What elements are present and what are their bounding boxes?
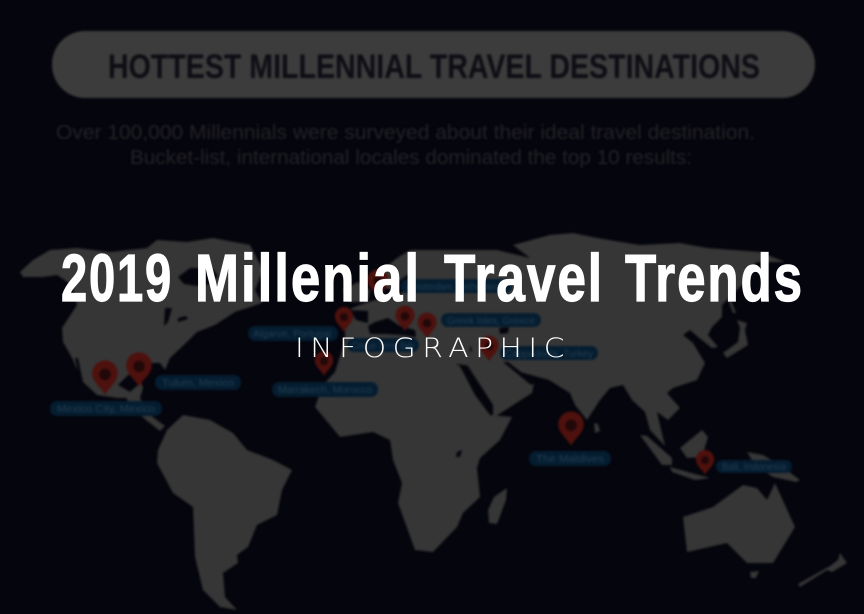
Gulf of Mexico [118,372,143,392]
pin: Marrakech [315,351,333,376]
map pins [92,269,714,475]
header pill [52,31,815,98]
intro text: Over 100,000 Millennials were surveyed about their ideal travel destination. [56,122,755,144]
Mediterranean Sea [368,318,416,337]
pin: Tulum [126,352,152,387]
pin: Amsterdam [368,269,388,298]
Hudson Bay [178,268,218,286]
Bay of Biscay [350,310,368,323]
Eurasia [347,233,785,446]
Borneo [680,430,708,458]
label: Mexico City: Mexico City, Mexico [57,404,155,415]
label: Tulum: Tulum, Mexico [162,378,234,389]
British Isles [343,282,370,302]
label: Tulum [155,375,241,390]
header text: HOTTEST MILLENNIAL TRAVEL DESTINATIONS [108,48,760,86]
label: Marrakech [272,382,378,397]
pin: Greek Isles [418,313,436,338]
African lakes [456,450,462,457]
New Guinea [747,452,800,482]
Sri Lanka [594,423,600,433]
main title: Travel [444,241,604,316]
label: Marrakech: Marrakech, Morocco [278,385,372,396]
pin: Cappadocia [480,336,498,361]
label: Cinque Terre [347,338,419,352]
pin: Cinque Terre [396,306,414,331]
South America [157,415,292,610]
Red Sea [459,365,493,413]
intro text [56,122,755,169]
label: Bali: Bali, Indonesia [722,462,786,473]
label: Algarve [248,326,338,341]
Great Lakes [164,308,172,326]
world map [20,233,847,610]
Tasmania [750,571,759,578]
label: Greek Isles: Greek Isles, Greece [447,316,535,327]
pin: Mexico City [92,360,118,395]
intro text: Bucket-list, international locales dominated the top 10 results: [130,147,692,169]
Africa [315,342,512,552]
pin: Bali [696,450,714,475]
main title: 2019 [61,241,173,316]
seas and lakes [75,268,535,457]
Gulf of California [75,358,83,382]
label: Mexico City [50,401,162,416]
label: Algarve: Algarve, Portugal [253,329,331,340]
subtitle: INFOGRAPHIC [295,332,565,364]
label: Cinque Terre: Cinque Terre, Italy [352,341,414,352]
main title: Trends [625,241,804,316]
Sumatra [640,435,672,465]
label: The Maldives: The Maldives [536,454,604,465]
label: The Maldives [529,451,611,466]
pin: Algarve [335,307,353,332]
main title [61,241,804,316]
main title: Millenial [195,241,421,316]
Sakhalin [728,300,736,313]
North America [20,238,263,398]
pin: The Maldives [558,411,584,446]
label: Amsterdam: Amsterdam, Netherlands [406,282,506,293]
Mediterranean lands [335,305,470,372]
Japan [723,320,748,358]
Java [670,467,710,480]
Australia [683,483,795,563]
Persian Gulf [503,362,535,385]
Central America [125,396,165,431]
Black Sea [499,327,509,334]
label: Cappadocia: Cappadocia, Turkey [505,349,593,360]
label: Greek Isles [441,313,541,327]
New Zealand [798,553,847,587]
location labels [50,279,792,473]
Madagascar [488,488,507,524]
